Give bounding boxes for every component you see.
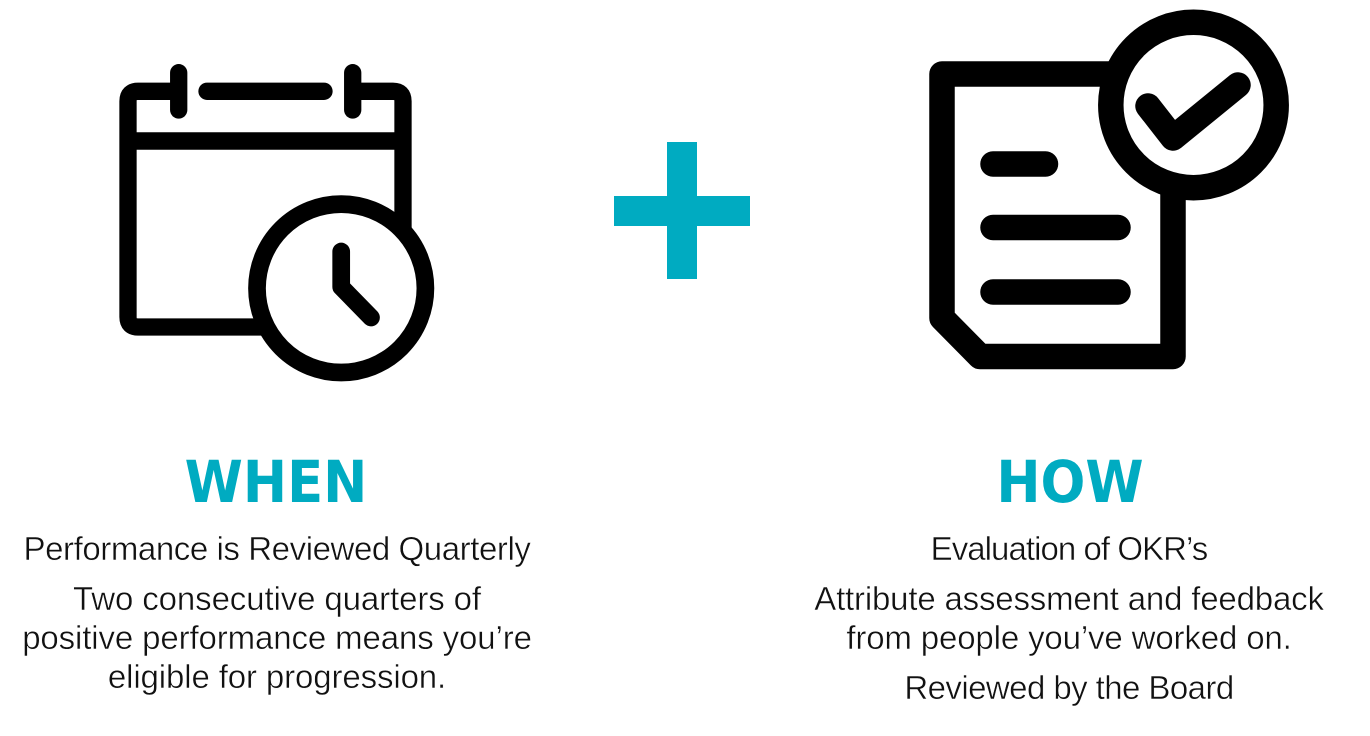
text: when paragraph: eligible for progression.	[108, 658, 446, 695]
text: when line 1: Performance is Reviewed Quarterly	[23, 530, 530, 567]
text: how paragraph: Attribute assessment and feedback	[814, 580, 1324, 617]
text: how paragraph	[814, 580, 1324, 656]
text: when paragraph	[22, 580, 532, 695]
text: how line 1: Evaluation of OKR’s	[931, 530, 1207, 567]
heading: HOW: HOW	[996, 448, 1144, 516]
heading: WHEN: WHEN	[185, 448, 367, 516]
icon: document with check mark	[942, 22, 1276, 357]
text: when paragraph: positive performance means you’re	[22, 619, 532, 656]
text: how line 3: Reviewed by the Board	[904, 669, 1234, 706]
icon: plus sign	[614, 142, 750, 279]
text: when paragraph: Two consecutive quarters of	[73, 580, 481, 617]
text: how paragraph: from people you’ve worked on.	[846, 619, 1292, 656]
icon: calendar with clock	[120, 73, 425, 372]
